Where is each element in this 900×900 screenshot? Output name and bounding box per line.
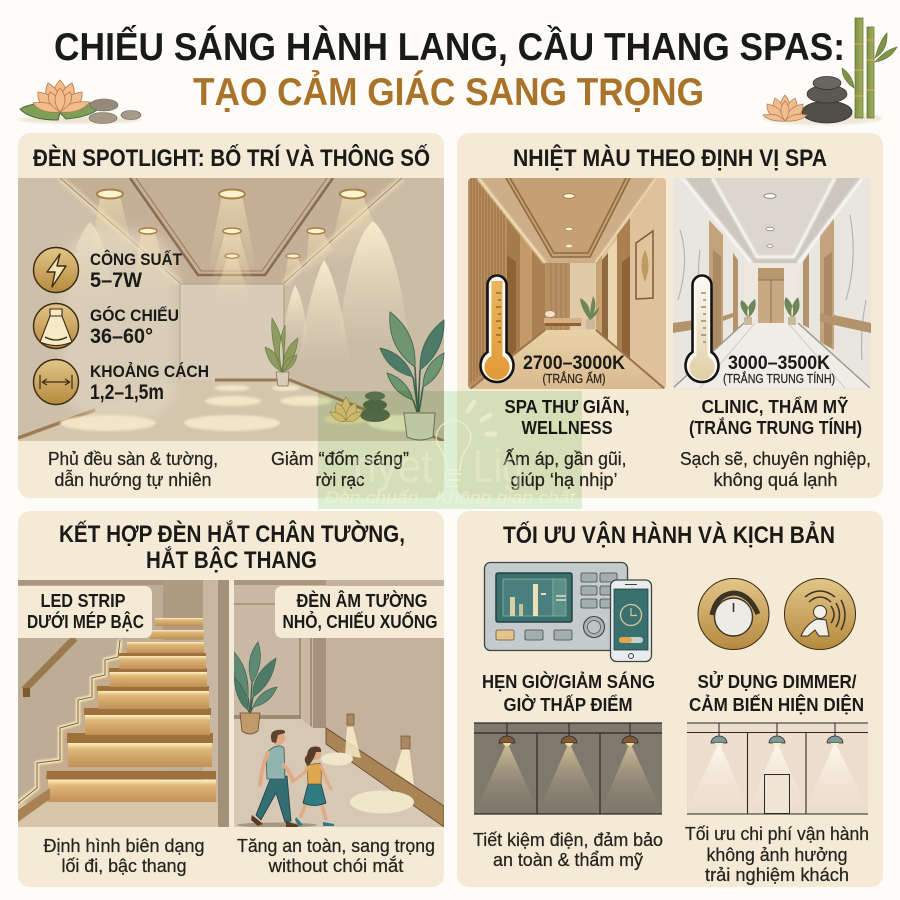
heading: ĐÈN SPOTLIGHT: BỐ TRÍ VÀ THÔNG SỐ (33, 144, 430, 172)
specification: spacing (90, 362, 209, 404)
icon: phone (610, 580, 652, 662)
caption: even coverage: Phủ đều sàn & tường, (48, 449, 218, 469)
icon: spacing (34, 360, 78, 404)
callout: LED strip: DƯỚI MÉP BẬC (27, 611, 144, 632)
caption: energy saving: Tiết kiệm điện, đảm bảo (473, 830, 663, 850)
diagram: dimmed corridor lights (474, 723, 662, 814)
illustration: wall lights and people (233, 580, 444, 828)
caption: warm (504, 448, 626, 490)
caption: profile (44, 836, 204, 876)
icon: dimmer (698, 578, 769, 650)
icon: lightning power (34, 248, 78, 292)
panel: operation and scenarios (457, 511, 883, 887)
callout: recessed wall light: ĐÈN ÂM TƯỜNG (296, 590, 428, 611)
watermark: nyet (353, 440, 433, 492)
watermark (318, 391, 582, 509)
illustration: corridor with spotlights (18, 178, 444, 441)
caption: cost: trải nghiệm khách (705, 865, 849, 885)
figure: girl (293, 747, 334, 826)
panel: spotlight (18, 133, 444, 498)
subheading: clinic: (TRẮNG TRUNG TÍNH) (689, 417, 862, 438)
watermark: Đèn chuẩn - Không gian chất (325, 488, 576, 507)
caption: clean: không quá lạnh (714, 470, 838, 490)
heading (59, 520, 405, 574)
panel: colour temperature (457, 133, 883, 498)
caption: reduce hot spots (271, 449, 409, 490)
specification: power: CÔNG SUẤT (90, 250, 183, 269)
icon: warm thermometer (480, 276, 514, 382)
specification: power: 5–7W (90, 269, 142, 292)
caption: safety: Tăng an toàn, sang trọng (237, 836, 435, 856)
caption: warm: giúp ‘hạ nhịp’ (510, 470, 618, 490)
caption: even coverage (48, 449, 218, 490)
panel background (18, 133, 444, 498)
caption: profile: Định hình biên dạng (44, 836, 204, 856)
title: CHIẾU SÁNG HÀNH LANG, CẦU THANG SPAS: (54, 25, 845, 69)
watermark: Lig (473, 440, 523, 492)
panel: wall and step lights (18, 511, 444, 887)
subheading: clinic (689, 396, 862, 438)
caption: cost: Tối ưu chi phí vận hành (685, 824, 869, 844)
caption: safety (237, 836, 435, 876)
caption: energy saving (473, 830, 663, 870)
label: 2700-3000K: (TRẮNG ẤM) (542, 371, 606, 386)
specification: power (90, 250, 183, 292)
subheading: wellness spa: SPA THƯ GIÃN, (504, 396, 630, 417)
subheading: wellness spa: WELLNESS (522, 417, 612, 438)
heading: TỐI ƯU VẬN HÀNH VÀ KỊCH BẢN (503, 520, 835, 549)
label: 2700-3000K (523, 353, 625, 386)
subheading: wellness spa (504, 396, 630, 438)
icon: bamboo, stones and lotus, top right (762, 18, 897, 125)
icon: beam angle (34, 304, 78, 348)
caption: energy saving: an toàn & thẩm mỹ (493, 850, 643, 870)
specification: beam angle: 36–60° (90, 325, 153, 348)
caption: warm: Ấm áp, gần gũi, (504, 448, 626, 469)
subheading: timer: GIỜ THẤP ĐIỂM (504, 694, 632, 715)
caption: safety: without chói mắt (267, 855, 404, 876)
icon: lotus and stones, top left (18, 80, 142, 124)
specification: spacing: 1,2–1,5m (90, 381, 164, 404)
label: 3000-3500K: 3000–3500K (728, 353, 830, 374)
panel background (457, 133, 883, 498)
heading: NHIỆT MÀU THEO ĐỊNH VỊ SPA (513, 144, 827, 172)
heading: HẮT BẬC THANG (146, 546, 317, 574)
diagram: bright corridor lights (687, 723, 868, 814)
caption: reduce hot spots: rời rạc (316, 470, 364, 490)
caption: even coverage: dẫn hướng tự nhiên (54, 469, 212, 490)
subheading: clinic: CLINIC, THẨM MỸ (702, 396, 849, 417)
illustration: staircase (18, 580, 229, 827)
title: TẠO CẢM GIÁC SANG TRỌNG (193, 70, 704, 114)
icon: presence sensor (784, 578, 856, 650)
panel background (457, 511, 883, 887)
caption: clean (680, 449, 871, 490)
specification: beam angle: GÓC CHIẾU (90, 306, 179, 325)
label: 2700-3000K: 2700–3000K (523, 353, 625, 374)
callout: recessed wall light: NHỎ, CHIẾU XUỐNG (282, 611, 438, 632)
icon: neutral thermometer (686, 276, 718, 382)
caption: reduce hot spots: Giảm “đốm sáng” (271, 449, 409, 469)
subheading: timer (482, 671, 655, 715)
callout: LED strip: LED STRIP (40, 590, 126, 611)
caption: profile: lối đi, bậc thang (62, 856, 186, 876)
title (54, 25, 845, 114)
subheading: timer: HẸN GIỜ/GIẢM SÁNG (482, 671, 655, 692)
subheading: dimmer: CẢM BIẾN HIỆN DIỆN (689, 694, 864, 715)
caption: cost: không ảnh hưởng (706, 845, 848, 865)
subheading: dimmer: SỬ DỤNG DIMMER/ (698, 671, 856, 692)
heading: KẾT HỢP ĐÈN HẮT CHÂN TƯỜNG, (59, 520, 405, 548)
panel background (18, 511, 444, 887)
illustration: neutral corridor (673, 178, 871, 389)
specification: spacing: KHOẢNG CÁCH (90, 362, 209, 381)
caption: clean: Sạch sẽ, chuyên nghiệp, (680, 449, 871, 469)
icon: control panel (484, 562, 628, 650)
callout: recessed wall light (275, 586, 444, 638)
figure: man (237, 730, 317, 828)
icon: small plant (265, 318, 298, 386)
icon: large plant with lotus and stones (324, 312, 444, 440)
subheading: dimmer (689, 671, 864, 715)
label: 3000-3500K: (TRẮNG TRUNG TÍNH) (723, 371, 835, 386)
specification: beam angle (90, 306, 179, 348)
caption: cost (685, 824, 869, 885)
callout: LED strip (18, 586, 152, 638)
label: 3000-3500K (723, 353, 835, 386)
illustration: warm corridor (468, 178, 666, 389)
